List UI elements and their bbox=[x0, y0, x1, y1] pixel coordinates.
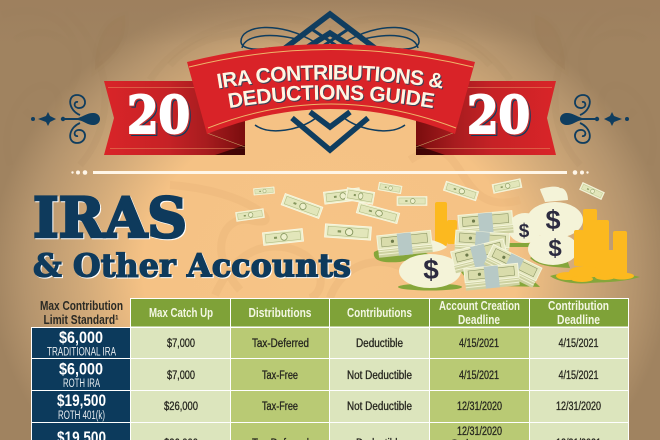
icon: left flourish bbox=[31, 95, 100, 143]
row: traditional IRA: TRADITIONAL IRA bbox=[47, 346, 116, 358]
row: Roth IRA: Tax-Free bbox=[262, 370, 298, 382]
dollar signs on bags: $ bbox=[548, 235, 562, 262]
front gold coins bbox=[556, 209, 634, 282]
banner title line 1: IRA CONTRIBUTIONS & bbox=[217, 65, 444, 90]
table headers: Contribution bbox=[548, 299, 609, 313]
table headers: Distributions bbox=[248, 306, 312, 320]
table headers: Deadline bbox=[458, 313, 500, 327]
table headers: Deadline bbox=[557, 313, 600, 327]
flying money bbox=[236, 179, 605, 245]
row: Roth IRA: 4/15/2021 bbox=[558, 370, 598, 382]
money bags bbox=[399, 187, 583, 288]
right ribbon bbox=[416, 81, 556, 155]
row: Roth 401(k): Not Deductible bbox=[347, 401, 412, 413]
dollar signs on bags bbox=[423, 205, 562, 285]
heading: IRAS: IRAS bbox=[33, 185, 187, 250]
back gold coins bbox=[435, 202, 457, 246]
left ribbon bbox=[104, 81, 245, 155]
dollar signs on bags: $ bbox=[423, 254, 439, 285]
row: Roth 401(k): $26,000 bbox=[164, 401, 198, 413]
bundled bills bbox=[377, 230, 433, 258]
banner title line 2: DEDUCTIONS GUIDE bbox=[228, 84, 436, 109]
table headers: Max Contribution bbox=[40, 299, 123, 313]
row: Roth IRA: ROTH IRA bbox=[63, 378, 100, 390]
row: Roth 401(k): $19,500 bbox=[57, 392, 106, 410]
row: Roth IRA: Not Deductible bbox=[347, 370, 412, 382]
table headers: Contributions bbox=[347, 306, 412, 320]
row: Roth 401(k): 12/31/2020 bbox=[556, 401, 601, 413]
row: Roth IRA: $6,000 bbox=[59, 360, 103, 378]
row: traditional IRA bbox=[47, 329, 598, 358]
divider rule with dots bbox=[71, 170, 589, 175]
diamond lattice ornament bbox=[241, 14, 419, 150]
money pile illustration bbox=[374, 187, 640, 291]
dollar signs on bags: $ bbox=[545, 205, 561, 235]
table headers: Account Creation bbox=[439, 299, 520, 313]
row: traditional IRA: $7,000 bbox=[167, 338, 195, 350]
icon: right flourish bbox=[560, 95, 629, 143]
row: Roth 401(k): Tax-Free bbox=[262, 401, 298, 413]
main banner bbox=[187, 44, 475, 134]
row: traditional IRA: 4/15/2021 bbox=[558, 338, 598, 350]
year right: 20: 20 bbox=[467, 86, 530, 146]
row: Roth 401(k): 12/31/2020 bbox=[457, 401, 502, 413]
heading: & Other Accounts: & Other Accounts bbox=[33, 246, 351, 284]
green ground shadows bbox=[374, 240, 640, 290]
table cell fills bbox=[31, 298, 629, 440]
row: traditional IRA: 4/15/2021 bbox=[459, 338, 499, 350]
row: Roth 401(k) bbox=[57, 392, 601, 422]
row: traditional IRA: $6,000 bbox=[59, 329, 103, 347]
lower background swirls bbox=[170, 150, 520, 298]
row: Roth IRA: $7,000 bbox=[167, 370, 195, 382]
table headers: Max Catch Up bbox=[149, 306, 213, 320]
row: traditional IRA: Tax-Deferred bbox=[252, 338, 309, 350]
dollar signs on bags: $ bbox=[519, 221, 530, 242]
table bbox=[31, 298, 629, 440]
row: Roth IRA bbox=[59, 360, 598, 390]
row: Roth IRA: 4/15/2021 bbox=[459, 370, 499, 382]
row: traditional IRA: Deductible bbox=[356, 338, 403, 350]
table headers bbox=[40, 299, 609, 327]
row: partially visible fourth row: 12/31/2020 bbox=[457, 426, 502, 438]
row: Roth 401(k): ROTH 401(k) bbox=[58, 410, 105, 422]
table headers: Limit Standard¹ bbox=[44, 313, 118, 327]
year left: 20: 20 bbox=[127, 86, 190, 146]
row: partially visible fourth row bbox=[57, 426, 601, 440]
background swirls bbox=[2, 10, 653, 165]
